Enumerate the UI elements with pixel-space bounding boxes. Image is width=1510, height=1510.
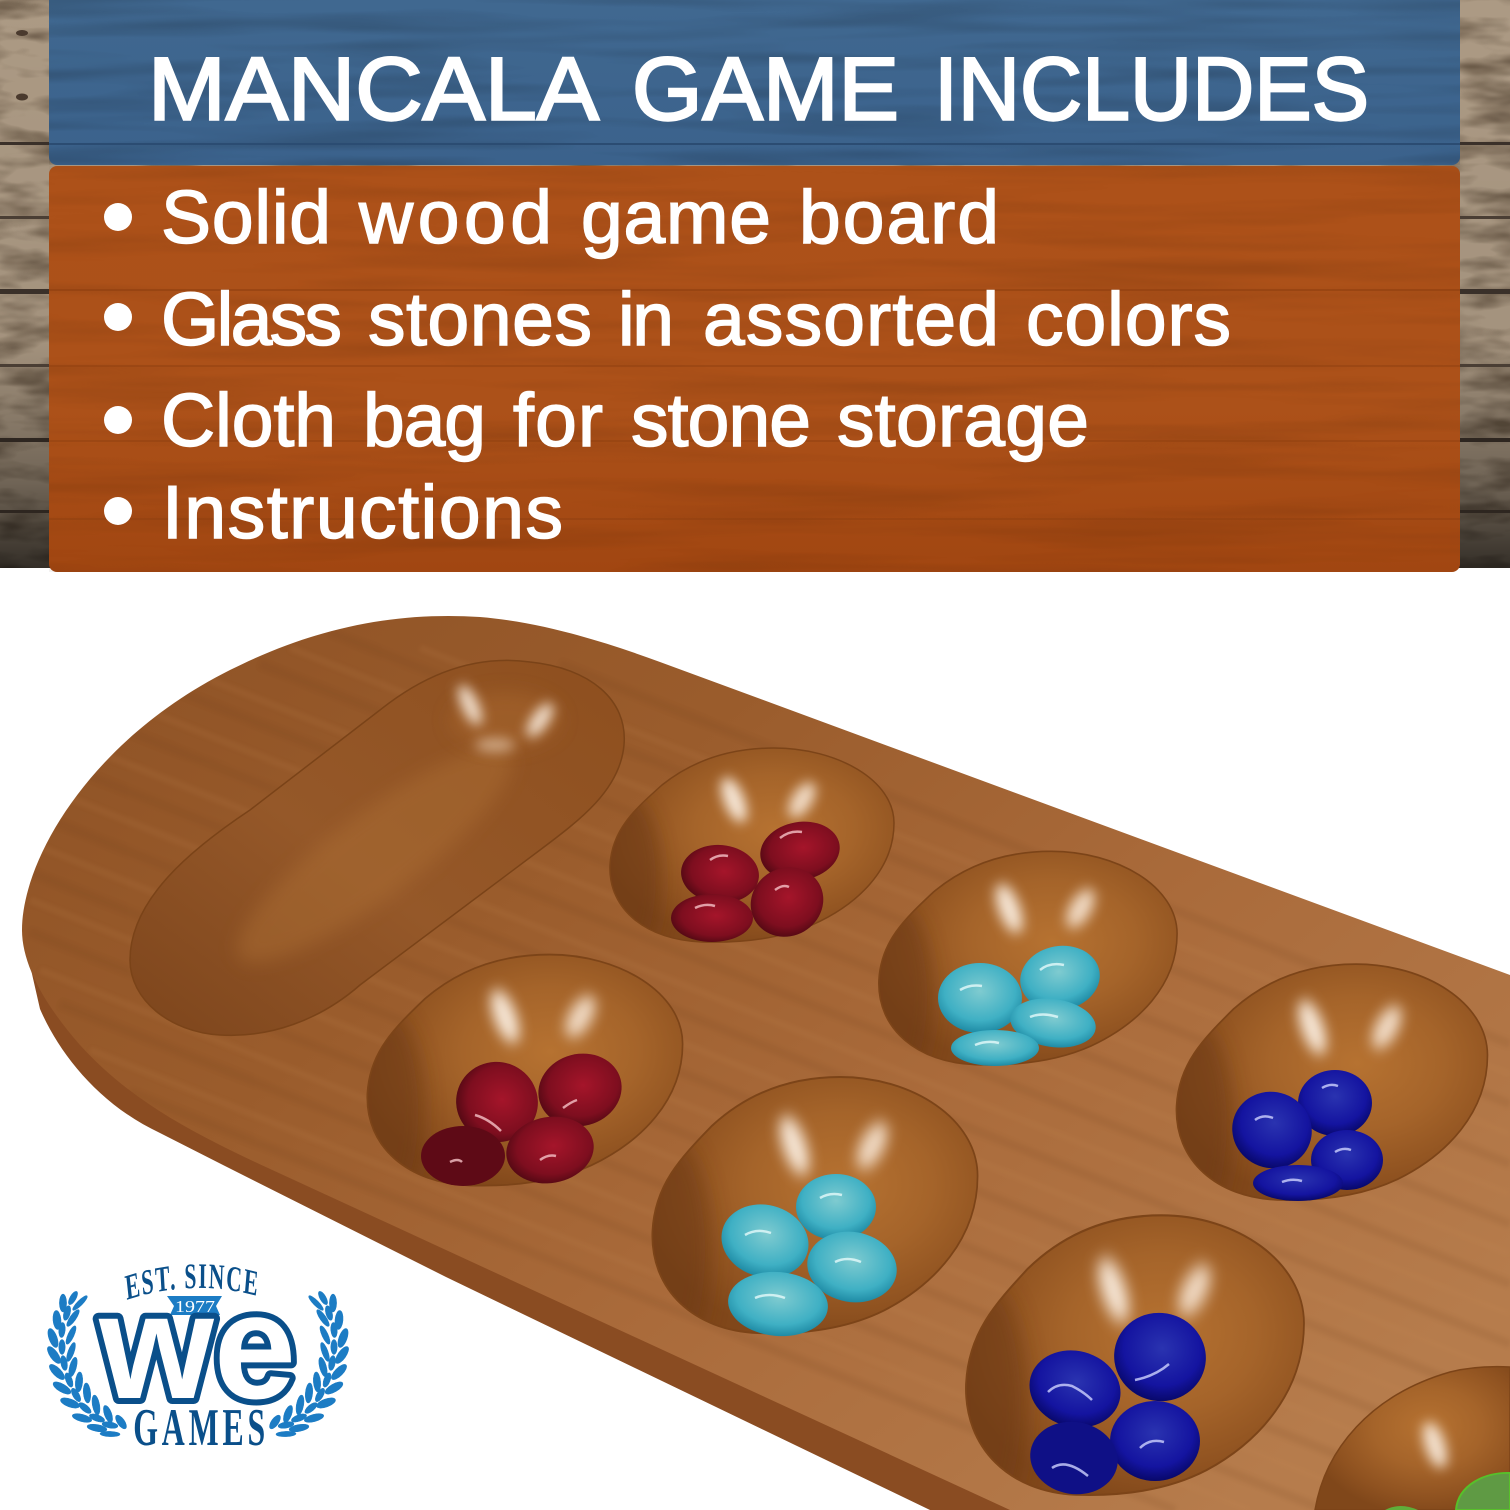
list item: glass stones: in	[618, 277, 674, 361]
list item: cloth bag: for	[513, 378, 603, 462]
list item: glass stones: assorted	[703, 277, 999, 361]
board side face	[22, 930, 1100, 1510]
stones: red	[671, 815, 844, 950]
stones: teal	[938, 940, 1105, 1066]
list item: cloth bag: bag	[363, 378, 486, 462]
list item: glass stones	[104, 277, 1231, 361]
list item: cloth bag	[104, 378, 1089, 462]
pit: top row blue stones	[1157, 964, 1487, 1228]
background: rustic wood planks	[0, 0, 1510, 568]
title: MANCALA	[148, 38, 600, 138]
list item: instructions: Instructions	[162, 470, 563, 554]
board top face	[22, 616, 1510, 1510]
logo: right laurel	[267, 1290, 351, 1437]
logo text: est. since: EST. SINCE	[124, 1264, 257, 1300]
logo: 1977 banner	[167, 1296, 222, 1316]
list item: glass stones: Glass	[161, 277, 342, 361]
list item: glass stones: stones	[368, 277, 592, 361]
logo: we wordmark: we	[98, 1262, 296, 1430]
logo text: games: GAMES	[133, 1399, 265, 1457]
pit: partial pit at lower right	[1315, 1367, 1510, 1510]
list item: cloth bag: Cloth	[161, 378, 336, 462]
pit: top row red stones	[592, 748, 894, 965]
pit: top row teal stones	[860, 851, 1177, 1090]
logo: WE Games	[47, 1262, 349, 1457]
pit: bottom row blue stones	[945, 1215, 1304, 1510]
logo: left laurel	[45, 1290, 129, 1437]
logo: 1977 banner: 1977	[175, 1297, 216, 1316]
list item: glass stones: colors	[1026, 277, 1231, 361]
stones: blue	[1221, 1070, 1383, 1201]
list item: cloth bag: stone	[631, 378, 811, 462]
mancala store: large end pit	[130, 660, 624, 1035]
pit: bottom row red stones	[347, 955, 683, 1213]
list item: solid wood game board	[104, 175, 999, 259]
mancala wooden board photo	[22, 616, 1510, 1510]
stones: green	[1385, 1473, 1510, 1510]
stones: red	[421, 1044, 630, 1190]
title: INCLUDES	[934, 38, 1369, 138]
list item: solid wood game board: wood	[358, 175, 552, 259]
list item: solid wood game board: game	[581, 175, 771, 259]
stones: teal	[713, 1174, 902, 1340]
pit: bottom row teal stones	[632, 1077, 978, 1363]
panel: blue title banner	[49, 0, 1460, 165]
list item: solid wood game board: board	[799, 175, 999, 259]
title: GAME	[632, 38, 899, 138]
panel: orange contents list	[49, 166, 1460, 572]
stones: blue	[1021, 1303, 1216, 1501]
list item: solid wood game board: Solid	[161, 175, 331, 259]
list item: cloth bag: storage	[837, 378, 1089, 462]
